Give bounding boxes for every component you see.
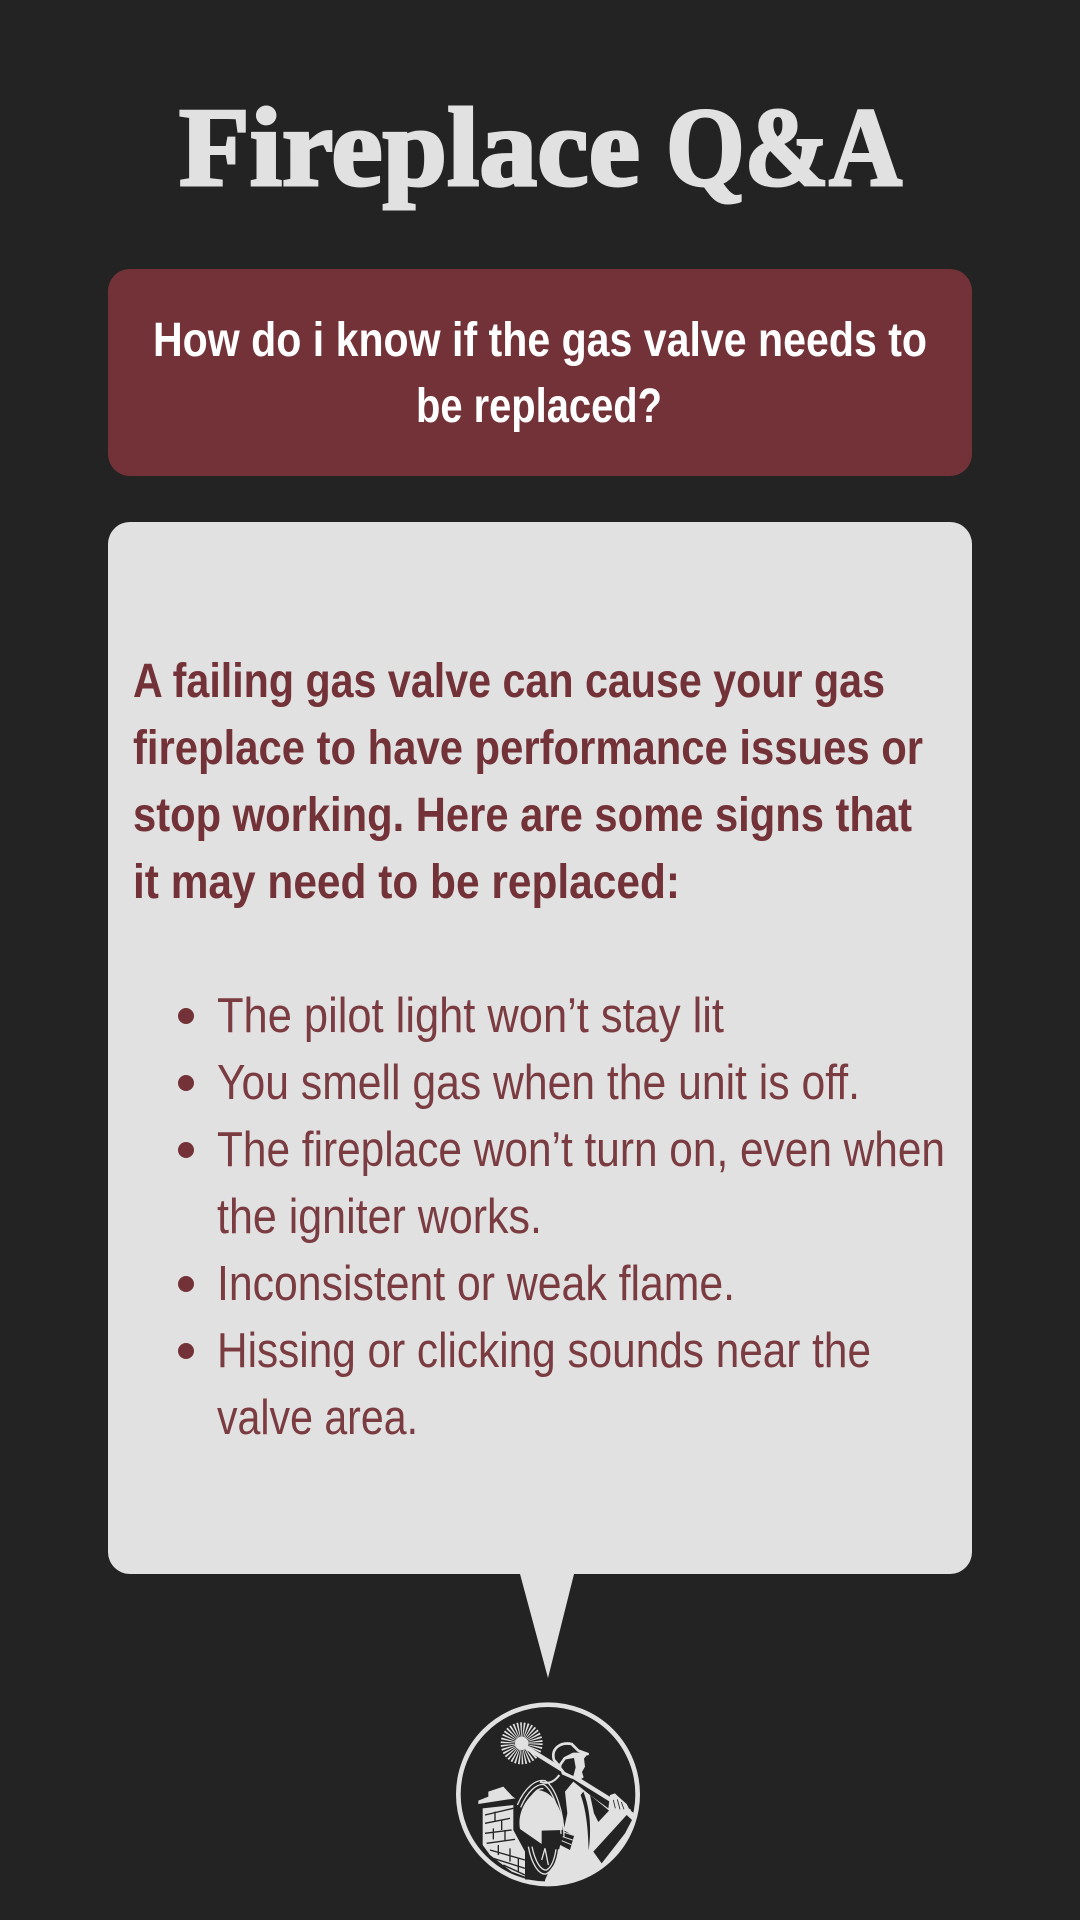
sweep brush: [509, 1731, 534, 1756]
bullet list of signs: The fireplace won’t turn on, even when: [217, 1123, 945, 1177]
bullet list of signs: You smell gas when the unit is off.: [217, 1056, 860, 1110]
title: Fireplace: [179, 86, 640, 210]
panel: question: [108, 269, 972, 476]
sweep figure: [516, 1742, 634, 1882]
answer intro text: [133, 655, 923, 909]
answer intro text: it may need to be replaced:: [133, 856, 680, 909]
question text: How do i know if the gas valve needs to: [153, 314, 927, 367]
answer intro text: fireplace to have performance issues or: [133, 722, 923, 775]
answer intro text: stop working. Here are some signs that: [133, 789, 912, 842]
chimney: [478, 1787, 525, 1877]
panel: answer speech bubble: [108, 522, 972, 1678]
title: [179, 86, 902, 210]
question text: [153, 314, 927, 433]
bullet list of signs: The pilot light won’t stay lit: [217, 989, 724, 1043]
answer intro text: A failing gas valve can cause your gas: [133, 655, 885, 708]
logo ring: [458, 1705, 638, 1884]
logo: chimney sweep badge: [458, 1705, 647, 1893]
bullet list of signs: Hissing or clicking sounds near the: [217, 1324, 871, 1378]
bullet list of signs: valve area.: [217, 1391, 418, 1445]
title: Q&A: [666, 86, 902, 210]
bullet list of signs: Inconsistent or weak flame.: [217, 1257, 735, 1311]
infographic canvas: [108, 106, 972, 1886]
bullet list of signs: the igniter works.: [217, 1190, 542, 1244]
bullet list of signs: [178, 989, 945, 1445]
question text: be replaced?: [416, 380, 662, 433]
